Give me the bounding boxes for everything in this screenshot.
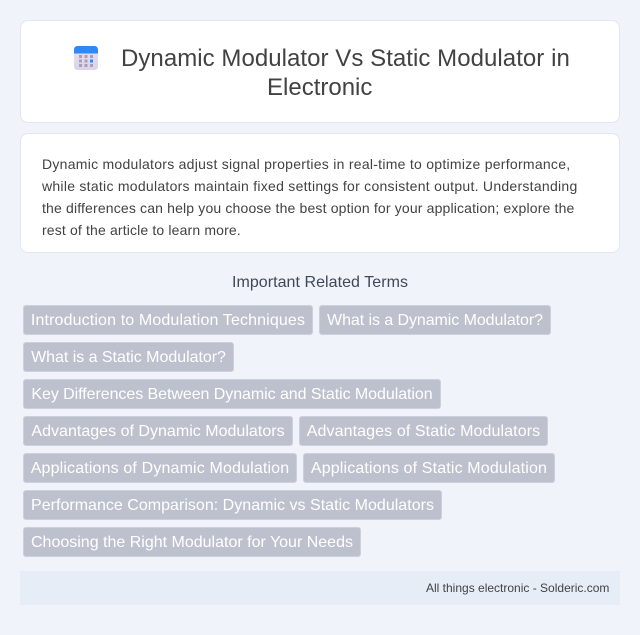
related terms tags [23,305,555,557]
tag: advantages dynamic [23,416,293,446]
footer bar [20,571,620,605]
tag: static: What is a Static Modulator? [31,349,226,366]
intro text: the differences can help you choose the best option for your application; explore the [42,200,574,216]
tag: key differences: Key Differences Between Dynamic and Static Modulation [31,386,433,403]
footer text: All things electronic - Solderic.com [426,581,609,595]
tag: applications dynamic [23,453,297,483]
tag: introduction [23,305,313,335]
tag: key differences [23,379,441,409]
tag: applications static: Applications of Static Modulation [311,460,547,477]
title [121,45,570,101]
tag: static [23,342,234,372]
tag: dynamic [319,305,551,335]
title: Dynamic Modulator Vs Static Modulator in [121,45,570,72]
intro text: rest of the article to learn more. [42,222,241,238]
tag: advantages dynamic: Advantages of Dynamic Modulators [31,423,285,440]
panel: intro card [20,133,620,253]
tag: applications dynamic: Applications of Dynamic Modulation [31,460,289,477]
panel: header card [20,20,620,123]
tag: performance: Performance Comparison: Dynamic vs Static Modulators [31,497,434,514]
icon: calendar [74,46,98,70]
tag: dynamic: What is a Dynamic Modulator? [327,312,543,329]
tag: introduction: Introduction to Modulation Techniques [31,312,305,329]
title: Electronic [267,74,372,101]
tag: choosing: Choosing the Right Modulator for Your Needs [31,534,353,551]
tag: advantages static [299,416,548,446]
section heading: Important Related Terms [232,274,408,291]
tag: performance [23,490,442,520]
tag: choosing [23,527,361,557]
tag: applications static [303,453,555,483]
intro text: Dynamic modulators adjust signal properties in real-time to optimize performance, [42,156,570,172]
tag: advantages static: Advantages of Static Modulators [307,423,540,440]
intro text: while static modulators maintain fixed settings for consistent output. Understanding [42,178,578,194]
intro text [42,156,578,238]
